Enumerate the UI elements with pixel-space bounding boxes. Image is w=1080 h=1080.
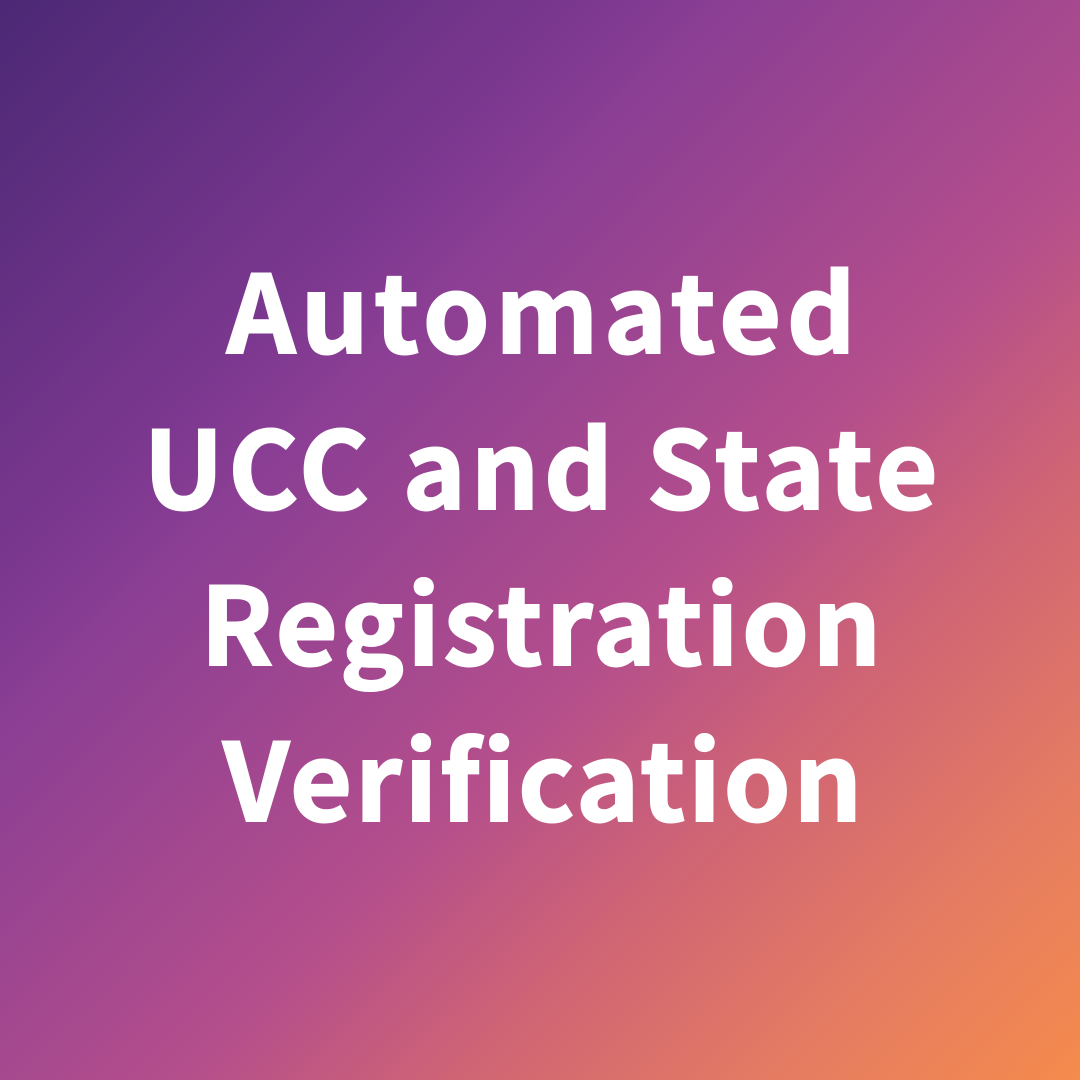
title: Verification <box>223 697 865 852</box>
title: UCC and State <box>143 385 943 540</box>
title: Automated <box>227 229 861 384</box>
title: Registration <box>200 541 885 696</box>
